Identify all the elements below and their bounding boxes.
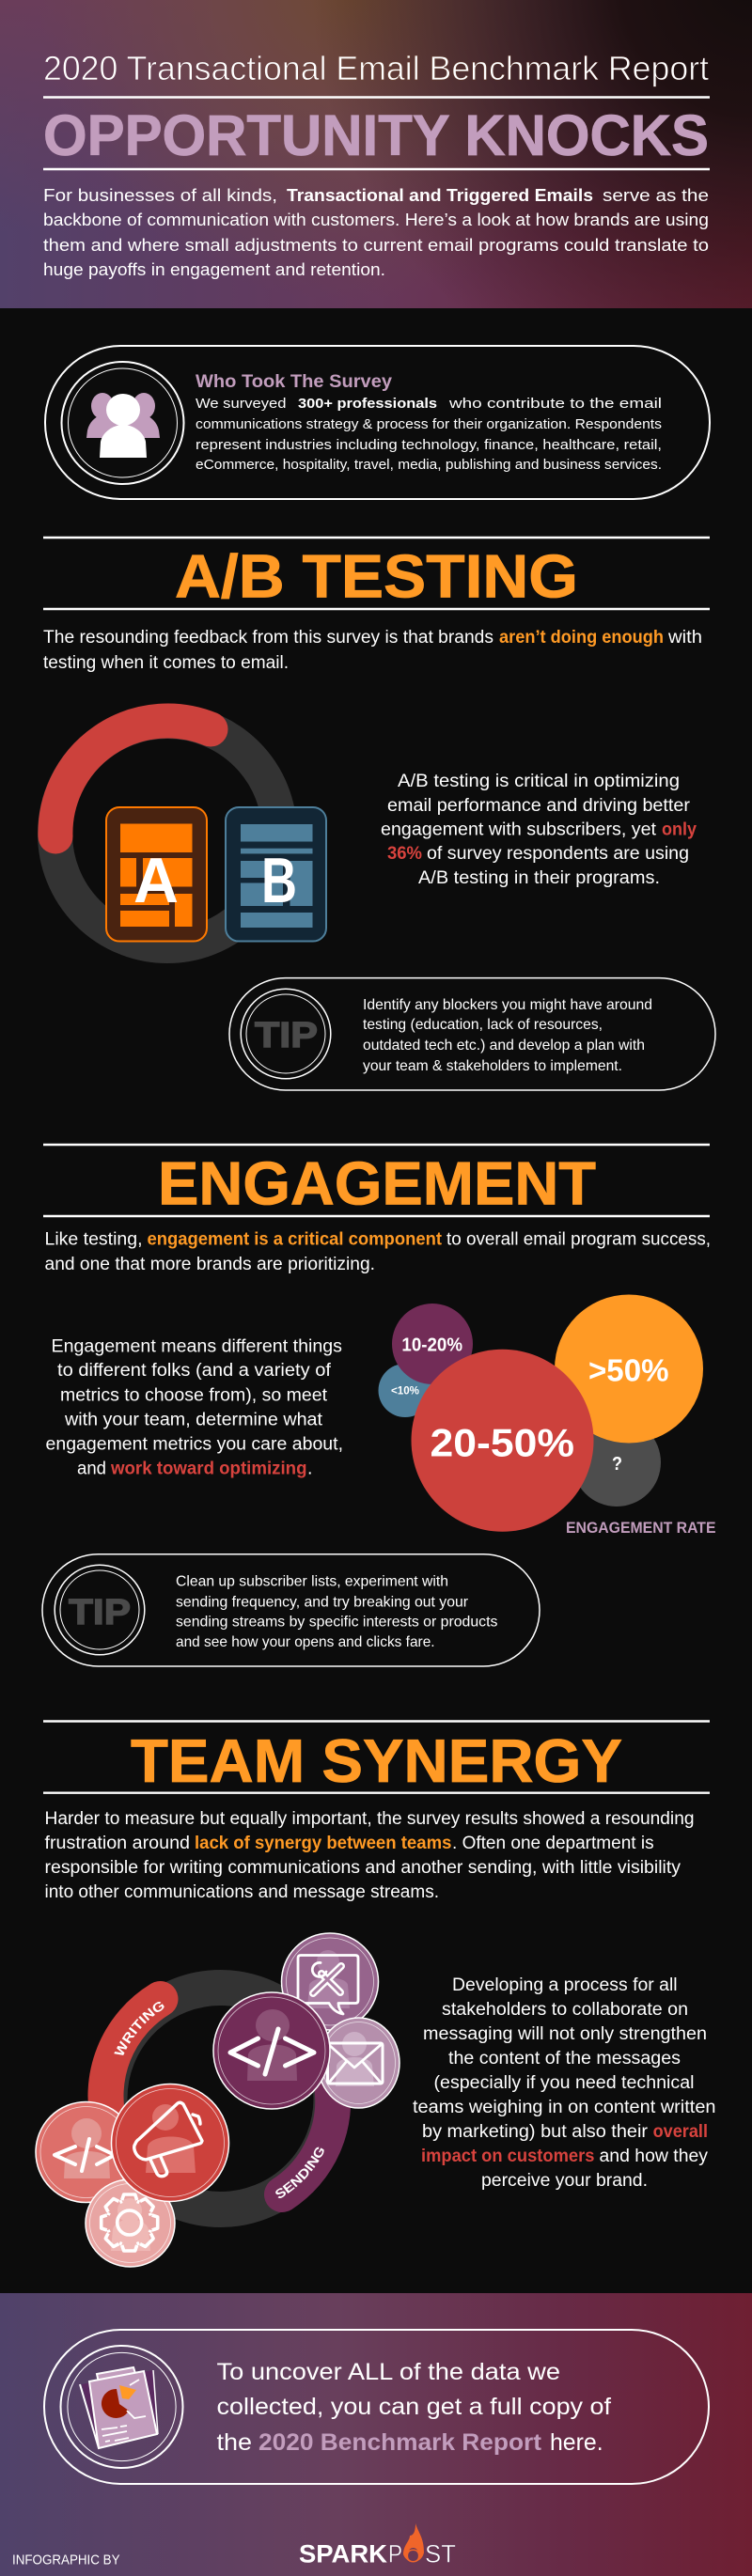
arc: writing bbox=[87, 1981, 179, 2113]
icon: tools bubble bbox=[282, 1933, 378, 2030]
text block: team synergy explanation: messaging will not only strengthen bbox=[423, 2023, 707, 2044]
heading: engagement: ENGAGEMENT bbox=[158, 1149, 596, 1218]
text block: a/b tip copy: testing (education, lack of resources, bbox=[363, 1017, 603, 1033]
text block: engagement intro: engagement is a critical component bbox=[147, 1229, 442, 1250]
bubble: under 10 percent bbox=[378, 1364, 432, 1417]
bubble: over 50 percent: >50% bbox=[588, 1353, 669, 1388]
text block: engagement tip copy: sending streams by specific interests or products bbox=[176, 1614, 498, 1630]
icon: report document bbox=[80, 2367, 158, 2449]
text block: engagement explanation: work toward optimizing bbox=[110, 1458, 306, 1478]
text block: a/b tip copy bbox=[363, 997, 652, 1074]
text block: team synergy explanation: stakeholders to collaborate on bbox=[442, 1999, 688, 2020]
text block: report call to action: To uncover ALL of the data we bbox=[216, 2359, 560, 2385]
logo: sparkpost bbox=[299, 2523, 456, 2568]
arc: sending: SENDING bbox=[275, 2147, 324, 2198]
text block: engagement tip copy: Clean up subscriber lists, experiment with bbox=[176, 1574, 448, 1590]
text block: survey description: represent industries including technology, finance, healthcare, retail, bbox=[196, 438, 662, 453]
text block: report call to action: here. bbox=[550, 2429, 603, 2456]
icon: tip badge: TIP bbox=[69, 1593, 131, 1632]
text block: team synergy intro: Harder to measure but equally important, the survey results showed a resounding bbox=[45, 1808, 694, 1829]
text block: a/b explanation: A/B testing in their programs. bbox=[418, 867, 660, 888]
bubble: under 10 percent: <10% bbox=[391, 1383, 419, 1397]
bubble: over 50 percent bbox=[555, 1295, 703, 1444]
bubble: 20 to 50 percent: 20-50% bbox=[431, 1421, 574, 1465]
text block: a/b explanation: engagement with subscribers, yet bbox=[381, 820, 657, 840]
chart: 36% donut with A and B cards bbox=[55, 721, 326, 945]
icon: small code bubble bbox=[36, 2101, 136, 2203]
title: report name: 2020 Transactional Email Benchmark Report bbox=[43, 49, 709, 87]
text block: a/b explanation: only bbox=[662, 820, 697, 840]
icon: megaphone bubble bbox=[111, 2084, 229, 2201]
logo: sparkpost: ST bbox=[425, 2540, 456, 2568]
icon: card A bbox=[106, 807, 207, 942]
text block: engagement explanation: Engagement means different things bbox=[51, 1336, 342, 1357]
text block: engagement explanation: and bbox=[77, 1458, 106, 1478]
icon: people bbox=[86, 393, 160, 458]
text block: a/b tip copy: your team & stakeholders to implement. bbox=[363, 1058, 622, 1074]
credit: infographic by: INFOGRAPHIC BY bbox=[12, 2553, 120, 2568]
text block: survey description: We surveyed bbox=[196, 397, 286, 412]
text block: a/b explanation bbox=[381, 771, 697, 888]
text block: intro paragraph: serve as the bbox=[603, 185, 709, 205]
icon: card B: B bbox=[261, 845, 297, 916]
text block: engagement tip copy: and see how your opens and clicks fare. bbox=[176, 1634, 435, 1650]
text block: engagement intro bbox=[45, 1229, 711, 1274]
text block: team synergy intro: lack of synergy between teams bbox=[195, 1833, 451, 1853]
text block: a/b intro: aren’t doing enough bbox=[499, 627, 664, 648]
bubble: 20 to 50 percent bbox=[412, 1350, 594, 1532]
icon: envelope bubble bbox=[318, 2018, 400, 2108]
bubble: 10 to 20 percent: 10-20% bbox=[401, 1335, 462, 1355]
text block: engagement intro: to overall email program success, bbox=[446, 1229, 711, 1250]
text block: team synergy intro: responsible for writing communications and another sending, with little visibility bbox=[45, 1857, 681, 1878]
text block: a/b intro bbox=[43, 627, 702, 673]
panel: header bbox=[0, 0, 752, 308]
heading: a/b testing: A/B TESTING bbox=[175, 541, 578, 611]
text block: a/b intro: The resounding feedback from this survey is that brands bbox=[43, 627, 494, 648]
text block: intro paragraph: them and where small adjustments to current email programs could translate to bbox=[43, 235, 709, 255]
text block: team synergy explanation: teams weighing in on content written bbox=[413, 2097, 716, 2117]
callout: a/b tip bbox=[229, 978, 715, 1090]
logo: sparkpost: O bbox=[405, 2547, 421, 2568]
title: opportunity knocks: OPPORTUNITY KNOCKS bbox=[43, 103, 709, 167]
text block: report call to action: collected, you can get a full copy of bbox=[216, 2394, 611, 2420]
text block: team synergy explanation: the content of the messages bbox=[448, 2048, 681, 2069]
heading: team synergy: TEAM SYNERGY bbox=[131, 1726, 622, 1795]
text block: engagement explanation: metrics to choose from), so meet bbox=[60, 1385, 328, 1406]
logo: sparkpost: SPARK bbox=[299, 2540, 388, 2568]
text block: engagement explanation: to different folks (and a variety of bbox=[57, 1360, 332, 1381]
text block: a/b tip copy: outdated tech etc.) and develop a plan with bbox=[363, 1038, 645, 1054]
text block: team synergy explanation: overall bbox=[653, 2121, 708, 2142]
icon: tip badge: TIP bbox=[255, 1016, 318, 1055]
heading: who took the survey: Who Took The Survey bbox=[196, 371, 392, 392]
text block: engagement intro: Like testing, bbox=[45, 1229, 143, 1250]
bubble: unknown bbox=[572, 1418, 661, 1507]
text block: engagement explanation: with your team, determine what bbox=[64, 1410, 323, 1430]
text block: engagement explanation: engagement metrics you care about, bbox=[45, 1434, 343, 1455]
text block: team synergy explanation: by marketing) but also their bbox=[422, 2121, 648, 2142]
text block: engagement tip copy bbox=[176, 1574, 498, 1650]
text block: a/b explanation: email performance and driving better bbox=[387, 795, 690, 816]
text block: team synergy explanation: impact on customers bbox=[421, 2146, 594, 2166]
text block: a/b intro: testing when it comes to email. bbox=[43, 652, 289, 673]
text block: team synergy explanation: and how they bbox=[600, 2146, 708, 2166]
text block: survey description: communications strategy & process for their organization. Respondents bbox=[196, 417, 662, 432]
text block: a/b explanation: A/B testing is critical in optimizing bbox=[398, 771, 680, 791]
logo: sparkpost: P bbox=[388, 2540, 402, 2568]
text block: a/b intro: with bbox=[667, 627, 702, 648]
text block: team synergy explanation bbox=[413, 1975, 716, 2191]
arc: writing: WRITING bbox=[114, 2002, 164, 2055]
text block: intro paragraph bbox=[43, 185, 709, 279]
text block: team synergy intro: frustration around bbox=[45, 1833, 190, 1853]
icon: gear bubble bbox=[86, 2179, 175, 2267]
bubble: unknown: ? bbox=[612, 1454, 622, 1475]
text block: a/b explanation: of survey respondents are using bbox=[427, 843, 689, 864]
text block: a/b tip copy: Identify any blockers you might have around bbox=[363, 997, 652, 1013]
text block: engagement explanation bbox=[45, 1336, 343, 1478]
text block: intro paragraph: Transactional and Triggered Emails bbox=[287, 185, 593, 205]
chart: engagement rate bubbles bbox=[378, 1295, 716, 1537]
chart label: engagement rate: ENGAGEMENT RATE bbox=[566, 1519, 716, 1537]
text block: report call to action: 2020 Benchmark Report bbox=[258, 2429, 542, 2456]
icon: card B bbox=[226, 807, 326, 942]
bubble: 10 to 20 percent bbox=[392, 1304, 473, 1384]
text block: team synergy intro: . Often one department is bbox=[452, 1833, 654, 1853]
icon: card A: A bbox=[133, 845, 179, 916]
text block: team synergy intro bbox=[45, 1808, 694, 1902]
arc: sending bbox=[264, 2083, 351, 2212]
callout: full report bbox=[44, 2330, 709, 2484]
text block: survey description: who contribute to the email bbox=[448, 397, 662, 412]
text block: survey description bbox=[196, 397, 662, 473]
text block: survey description: 300+ professionals bbox=[298, 397, 437, 412]
text block: a/b explanation: 36% bbox=[387, 843, 422, 864]
text block: team synergy explanation: (especially if you need technical bbox=[434, 2072, 694, 2093]
callout: engagement tip bbox=[42, 1554, 540, 1666]
text block: engagement explanation: . bbox=[307, 1458, 312, 1478]
text block: team synergy explanation: Developing a process for all bbox=[452, 1975, 678, 1995]
text block: team synergy explanation: perceive your brand. bbox=[481, 2170, 648, 2191]
text block: intro paragraph: backbone of communication with customers. Here’s a look at how brands are using bbox=[43, 210, 709, 229]
text block: intro paragraph: huge payoffs in engagement and retention. bbox=[43, 259, 385, 279]
text block: engagement tip copy: sending frequency, and try breaking out your bbox=[176, 1595, 468, 1611]
icon: code bubble bbox=[213, 1992, 330, 2109]
text block: survey description: eCommerce, hospitality, travel, media, publishing and business services. bbox=[196, 458, 662, 473]
text block: team synergy intro: into other communications and message streams. bbox=[45, 1881, 439, 1902]
panel: who took the survey bbox=[45, 346, 710, 499]
text block: report call to action: the bbox=[216, 2429, 252, 2456]
text block: report call to action bbox=[216, 2359, 611, 2456]
diagram: writing and sending ring bbox=[35, 1932, 400, 2268]
text block: engagement intro: and one that more brands are prioritizing. bbox=[45, 1254, 375, 1274]
panel: footer bbox=[0, 2293, 752, 2576]
text block: intro paragraph: For businesses of all kinds, bbox=[43, 185, 277, 205]
